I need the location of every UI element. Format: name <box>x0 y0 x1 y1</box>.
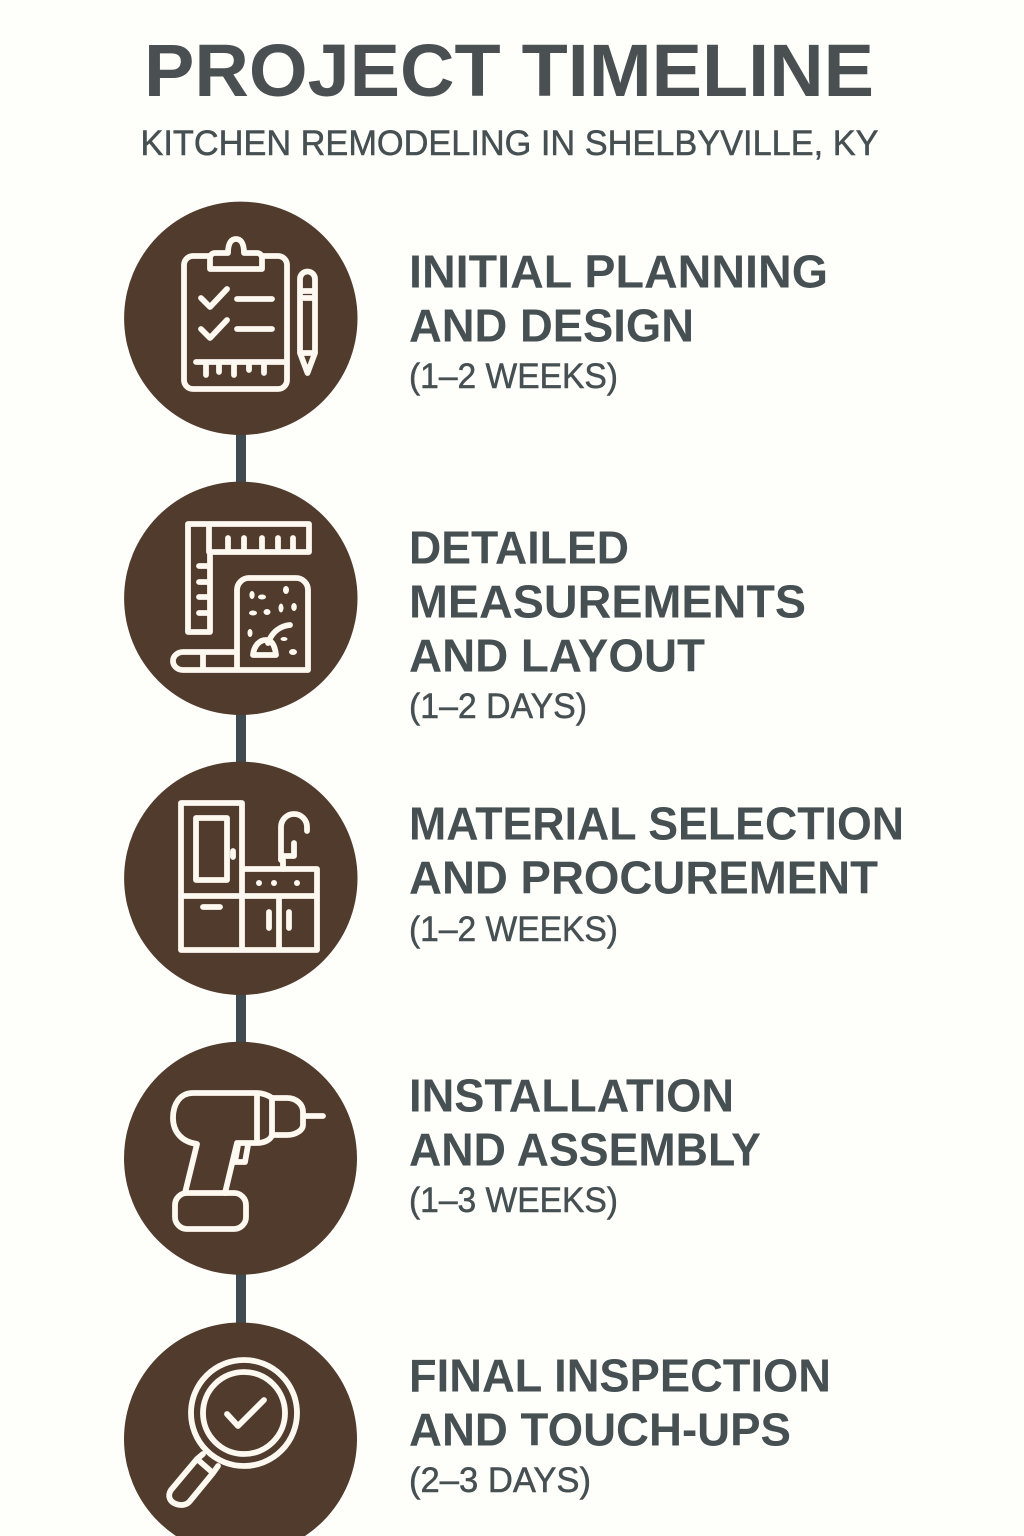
step 2 circle <box>124 482 358 715</box>
step 3: material selection and procurement <box>124 762 904 995</box>
step 4 heading: INSTALLATION <box>409 1070 734 1122</box>
step 3 circle <box>124 762 358 995</box>
subtitle: KITCHEN REMODELING IN SHELBYVILLE, KY <box>140 124 878 163</box>
step 1 circle <box>124 202 358 435</box>
icon: clipboard and pencil <box>184 239 315 389</box>
step 4 circle <box>124 1042 357 1275</box>
step 3 heading: MATERIAL SELECTION <box>409 798 904 850</box>
step 2 heading: DETAILED <box>409 522 629 574</box>
step 2: detailed measurements and layout: AND LAYOUT <box>409 630 705 682</box>
icon: kitchen cabinets and faucet <box>181 803 317 950</box>
timeline connectors <box>236 430 246 1328</box>
step 5 duration: (2–3 DAYS) <box>409 1461 591 1500</box>
step 4: installation and assembly <box>124 1042 761 1275</box>
title: PROJECT TIMELINE <box>144 29 874 112</box>
step 2 duration: (1–2 DAYS) <box>409 687 587 726</box>
step 1 duration: (1–2 WEEKS) <box>409 357 618 396</box>
step 4: installation and assembly: AND ASSEMBLY <box>409 1124 761 1176</box>
step 3 duration: (1–2 WEEKS) <box>409 910 618 949</box>
step 5 circle <box>124 1322 357 1536</box>
icon: cordless drill <box>173 1093 323 1229</box>
step 1 heading: INITIAL PLANNING <box>409 246 828 298</box>
step 1: initial planning and design: AND DESIGN <box>409 300 694 352</box>
step 2: detailed measurements and layout <box>124 482 806 726</box>
icon: magnifying glass with check <box>169 1360 297 1505</box>
step 4 duration: (1–3 WEEKS) <box>409 1181 618 1220</box>
step 5: final inspection and touch-ups <box>124 1322 831 1536</box>
step 5: final inspection and touch-ups: AND TOUCH-UPS <box>409 1404 791 1456</box>
icon: ruler and layout plan <box>173 524 309 670</box>
step 2: detailed measurements and layout: MEASUREMENTS <box>409 576 806 628</box>
step 1: initial planning and design <box>124 202 828 435</box>
step 3: material selection and procurement: AND PROCUREMENT <box>409 852 878 904</box>
step 5 heading: FINAL INSPECTION <box>409 1350 831 1402</box>
